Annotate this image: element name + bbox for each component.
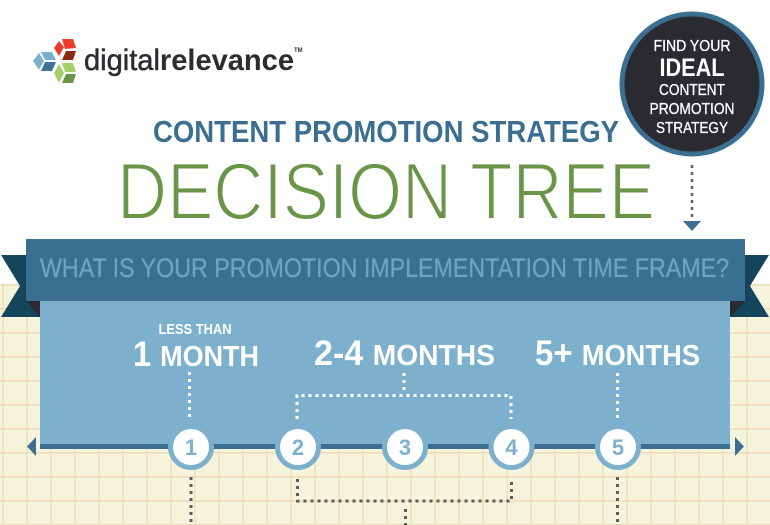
ribbon tails [1,255,769,317]
badge: find your ideal content promotion strategy: CONTENT [659,82,725,99]
badge: find your ideal content promotion strategy: FIND YOUR [654,38,730,55]
node 1 [170,426,212,468]
white dotted connectors [190,372,618,419]
badge: find your ideal content promotion strategy [622,14,762,154]
badge: find your ideal content promotion strategy: STRATEGY [656,120,728,137]
panel: time frame options [40,300,730,449]
node 3 [384,426,426,468]
node 5: 5 [612,435,624,460]
badge: find your ideal content promotion strategy: PROMOTION [650,101,734,118]
node 5 [598,426,638,468]
dark dotted connectors [191,477,618,525]
title: content promotion strategy: CONTENT PROMOTION STRATEGY [153,114,619,149]
option: 2-4 months: 2-4 MONTHS [314,334,495,373]
badge: find your ideal content promotion strategy: IDEAL [660,54,724,82]
logo: digitalrelevance [33,39,303,83]
node 4: 4 [505,435,518,460]
arrow: badge to question [683,165,701,231]
logo mark [33,39,76,83]
node 4 [491,426,532,468]
option: less than 1 month: 1 MONTH [133,335,259,374]
option: less than 1 month: LESS THAN [158,322,232,338]
trademark: TM [294,48,303,54]
timeline arrows [27,437,744,456]
node 3: 3 [399,435,411,460]
node 1: 1 [185,435,197,460]
title: decision tree: DECISION TREE [117,147,655,237]
option: 5+ months: 5+ MONTHS [535,334,700,373]
node 2: 2 [292,435,304,460]
header: question [26,239,745,301]
logo wordmark: digitalrelevance [84,44,294,77]
node 2 [278,426,318,468]
timeline band [40,444,730,449]
